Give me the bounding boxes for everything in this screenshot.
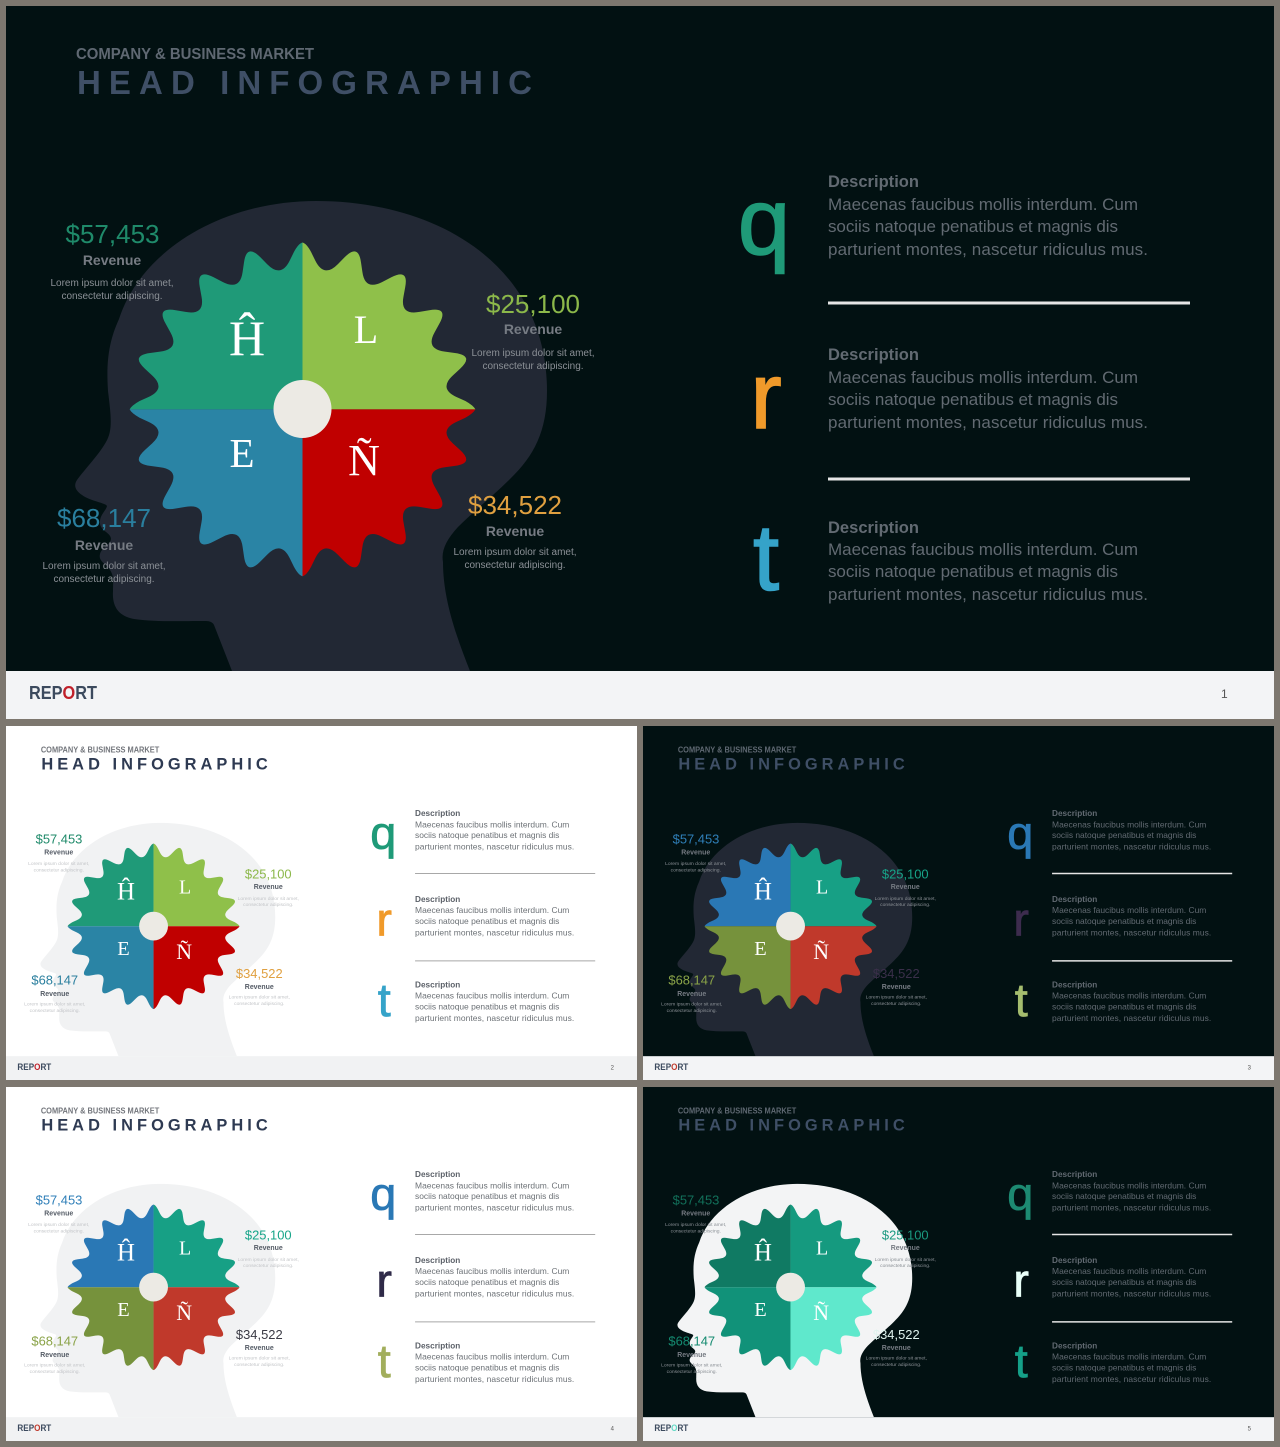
description 2: Maecenas faucibus mollis interdum. Cum — [1052, 1266, 1206, 1276]
stat: 25,100: $25,100 — [245, 866, 292, 881]
footer — [6, 1056, 637, 1080]
footer — [643, 1056, 1274, 1080]
stat: 34,522 — [866, 966, 927, 1007]
stat: 68,147: $68,147 — [57, 503, 151, 533]
stat: 34,522: consectetur adipiscing. — [234, 1001, 284, 1007]
description 3: parturient montes, nascetur ridiculus mus. — [1052, 1374, 1211, 1384]
head silhouette — [677, 823, 912, 1056]
description 3: parturient montes, nascetur ridiculus mus. — [415, 1374, 574, 1384]
stat: 57,453: $57,453 — [673, 1193, 719, 1208]
description 2: Maecenas faucibus mollis interdum. Cum — [1052, 905, 1206, 915]
stat: 68,147: consectetur adipiscing. — [54, 574, 154, 585]
title — [41, 745, 268, 774]
stat: 68,147: $68,147 — [31, 973, 78, 988]
stat: 34,522: $34,522 — [873, 1327, 920, 1342]
stat: 57,453: consectetur adipiscing. — [671, 867, 721, 873]
title: COMPANY & BUSINESS MARKET — [678, 1106, 796, 1115]
stat: 68,147 — [661, 1334, 722, 1375]
description 2 — [1052, 1256, 1211, 1299]
stat: 57,453: consectetur adipiscing. — [34, 867, 84, 873]
stat: 57,453: Lorem ipsum dolor sit amet, — [665, 1222, 726, 1228]
stat: 68,147: $68,147 — [668, 1334, 715, 1349]
title: COMPANY & BUSINESS MARKET — [678, 745, 796, 754]
description 3: parturient montes, nascetur ridiculus mus. — [415, 1013, 574, 1023]
description 2: sociis natoque penatibus et magnis dis — [1052, 1277, 1196, 1287]
stat: 34,522: Revenue — [486, 523, 544, 539]
description 2: Description — [1052, 895, 1097, 904]
letter t: t — [1015, 1335, 1028, 1387]
footer: REPORT — [17, 1423, 52, 1433]
gear letters: Ĥ — [117, 1238, 135, 1266]
title — [678, 745, 905, 774]
stat: 68,147: consectetur adipiscing. — [30, 1008, 80, 1014]
gear center circle — [776, 1273, 805, 1301]
stat: 57,453: Revenue — [44, 1211, 73, 1218]
description 2: sociis natoque penatibus et magnis dis — [828, 390, 1118, 409]
description 3: sociis natoque penatibus et magnis dis — [1052, 1363, 1196, 1372]
stat: 57,453: Revenue — [83, 252, 141, 268]
stat: 68,147: Revenue — [75, 537, 133, 553]
description 3 — [415, 981, 574, 1023]
description 1: sociis natoque penatibus et magnis dis — [828, 217, 1118, 236]
description 1 — [1052, 1170, 1211, 1213]
stat: 25,100: consectetur adipiscing. — [482, 361, 584, 372]
title — [678, 1106, 905, 1135]
head silhouette — [40, 823, 275, 1056]
stat: 34,522: $34,522 — [236, 1327, 283, 1342]
description 1: Maecenas faucibus mollis interdum. Cum — [415, 1180, 569, 1190]
stat: 57,453: Revenue — [681, 1211, 710, 1218]
head silhouette — [75, 201, 547, 671]
description 2: Maecenas faucibus mollis interdum. Cum — [415, 905, 569, 915]
description 3: Maecenas faucibus mollis interdum. Cum — [1052, 1352, 1206, 1362]
gear letters: Ñ — [813, 1301, 829, 1325]
stat: 68,147: $68,147 — [31, 1334, 78, 1349]
stat: 25,100 — [875, 866, 936, 908]
stat: 57,453: Lorem ipsum dolor sit amet, — [28, 861, 89, 867]
stat: 68,147 — [661, 973, 722, 1014]
description 1: Maecenas faucibus mollis interdum. Cum — [1052, 1180, 1206, 1190]
gear center circle — [274, 380, 332, 438]
stat: 25,100: $25,100 — [245, 1227, 292, 1242]
stat: 57,453: Revenue — [681, 850, 710, 857]
description 1: Description — [415, 809, 460, 818]
description 2: parturient montes, nascetur ridiculus mus. — [1052, 1289, 1211, 1299]
stat: 57,453: consectetur adipiscing. — [34, 1228, 84, 1234]
description 2: Description — [415, 1256, 460, 1265]
gear chart — [705, 843, 877, 1009]
stat: 25,100 — [238, 1227, 299, 1269]
stat: 25,100: Revenue — [254, 1245, 283, 1252]
stat: 68,147: Lorem ipsum dolor sit amet, — [24, 1363, 85, 1369]
description 3: sociis natoque penatibus et magnis dis — [828, 562, 1118, 581]
gear letters: L — [179, 1237, 191, 1259]
stat: 68,147: Revenue — [40, 1352, 69, 1359]
description 2: sociis natoque penatibus et magnis dis — [415, 1277, 559, 1287]
stat: 68,147: Lorem ipsum dolor sit amet, — [24, 1002, 85, 1008]
footer: REPORT — [29, 683, 97, 703]
description 1: parturient montes, nascetur ridiculus mus. — [1052, 842, 1211, 852]
stat: 25,100: consectetur adipiscing. — [880, 1263, 930, 1269]
description 1: sociis natoque penatibus et magnis dis — [1052, 1191, 1196, 1201]
stat: 57,453: $57,453 — [66, 219, 159, 249]
gear chart — [68, 843, 240, 1009]
description 3: Maecenas faucibus mollis interdum. Cum — [828, 540, 1138, 559]
description 2: Maecenas faucibus mollis interdum. Cum — [415, 1266, 569, 1276]
stat: 34,522: Lorem ipsum dolor sit amet, — [866, 1356, 927, 1362]
gear letters — [754, 876, 829, 964]
description 2: parturient montes, nascetur ridiculus mus. — [415, 928, 574, 938]
gear letters: E — [754, 1299, 767, 1321]
description 1: sociis natoque penatibus et magnis dis — [1052, 830, 1196, 840]
stat: 34,522: Revenue — [882, 984, 911, 991]
stat: 57,453 — [28, 832, 89, 873]
gear letters: Ñ — [813, 940, 829, 964]
description 3 — [1052, 981, 1211, 1023]
gear letters: E — [754, 938, 767, 960]
head silhouette — [677, 1184, 912, 1417]
slide 1: large dark variant — [6, 6, 1274, 719]
stat: 25,100 — [238, 866, 299, 908]
letter t: t — [378, 974, 391, 1026]
gear center circle — [776, 912, 805, 940]
gear letters: Ĥ — [229, 310, 265, 366]
stat: 57,453: consectetur adipiscing. — [62, 291, 162, 302]
stat: 25,100: $25,100 — [486, 289, 580, 319]
letter q: q — [738, 169, 790, 274]
gear center circle — [139, 912, 168, 940]
stat: 34,522: Revenue — [245, 984, 274, 991]
letter r: r — [1013, 1255, 1029, 1307]
gear letters — [754, 1237, 829, 1325]
stat: 68,147: Revenue — [40, 991, 69, 998]
stat: 57,453 — [665, 832, 726, 873]
footer — [643, 1417, 1274, 1441]
stat: 25,100 — [875, 1227, 936, 1269]
stat: 34,522: $34,522 — [236, 966, 283, 981]
stat: 68,147: Revenue — [677, 991, 706, 998]
description 2: parturient montes, nascetur ridiculus mus. — [828, 413, 1148, 432]
stat: 25,100: Lorem ipsum dolor sit amet, — [472, 348, 594, 359]
stat: 57,453 — [28, 1193, 89, 1234]
title — [76, 46, 532, 101]
stat: 25,100: Revenue — [504, 321, 562, 337]
description 3: Description — [415, 981, 460, 990]
gear letters: Ĥ — [754, 1238, 772, 1266]
description 2: parturient montes, nascetur ridiculus mus. — [1052, 928, 1211, 938]
stat: 68,147: consectetur adipiscing. — [30, 1369, 80, 1375]
letter r: r — [1013, 894, 1029, 946]
gear chart — [68, 1204, 240, 1370]
stat: 25,100: Lorem ipsum dolor sit amet, — [238, 1257, 299, 1263]
stat: 25,100: consectetur adipiscing. — [880, 902, 930, 908]
description 1 — [415, 809, 574, 852]
stat: 57,453 — [665, 1193, 726, 1234]
letter r: r — [376, 894, 392, 946]
letter r: r — [376, 1255, 392, 1307]
stat: 68,147 — [42, 503, 166, 585]
stat: 34,522: Revenue — [882, 1345, 911, 1352]
title: HEAD INFOGRAPHIC — [41, 1117, 268, 1135]
description 2 — [828, 346, 1148, 432]
slide 2: small light variant — [6, 726, 637, 1080]
stat: 34,522: Lorem ipsum dolor sit amet, — [866, 995, 927, 1001]
gear letters: E — [229, 430, 255, 476]
description 1 — [415, 1170, 574, 1213]
head silhouette — [40, 1184, 275, 1417]
stat: 68,147: $68,147 — [668, 973, 715, 988]
description 2 — [1052, 895, 1211, 938]
description 1: parturient montes, nascetur ridiculus mus. — [1052, 1203, 1211, 1213]
letter q: q — [370, 1168, 396, 1220]
stat: 34,522: $34,522 — [873, 966, 920, 981]
gear letters: E — [117, 938, 130, 960]
description 3: Maecenas faucibus mollis interdum. Cum — [415, 991, 569, 1001]
description 2 — [415, 1256, 574, 1299]
gear letters: L — [179, 876, 191, 898]
description 1: Maecenas faucibus mollis interdum. Cum — [1052, 819, 1206, 829]
stat: 68,147: consectetur adipiscing. — [667, 1008, 717, 1014]
gear letters: Ñ — [176, 940, 192, 964]
stat: 68,147: Revenue — [677, 1352, 706, 1359]
stat: 57,453: Lorem ipsum dolor sit amet, — [665, 861, 726, 867]
stat: 57,453: Revenue — [44, 850, 73, 857]
footer — [6, 671, 1274, 719]
description 1: Description — [1052, 1170, 1097, 1179]
letter t: t — [378, 1335, 391, 1387]
stat: 25,100 — [472, 289, 594, 372]
description 2: Description — [415, 895, 460, 904]
description 1 — [828, 173, 1148, 259]
gear letters: L — [816, 876, 828, 898]
stat: 57,453: Lorem ipsum dolor sit amet, — [50, 278, 174, 289]
stat: 57,453: $57,453 — [36, 832, 82, 847]
stat: 68,147: Lorem ipsum dolor sit amet, — [661, 1363, 722, 1369]
stat: 34,522: consectetur adipiscing. — [464, 560, 566, 571]
stat: 34,522: Lorem ipsum dolor sit amet, — [229, 1356, 290, 1362]
description 3: Description — [415, 1342, 460, 1351]
letter q: q — [1007, 1168, 1033, 1220]
stat: 25,100: Revenue — [254, 884, 283, 891]
gear letters: Ñ — [348, 436, 380, 485]
stat: 57,453 — [50, 219, 174, 302]
letter r: r — [750, 343, 782, 448]
stat: 57,453: consectetur adipiscing. — [671, 1228, 721, 1234]
description 1: parturient montes, nascetur ridiculus mus. — [415, 842, 574, 852]
gear letters — [117, 1237, 192, 1325]
stat: 25,100: Lorem ipsum dolor sit amet, — [238, 896, 299, 902]
footer: 4 — [611, 1427, 615, 1433]
stat: 25,100: Lorem ipsum dolor sit amet, — [875, 1257, 936, 1263]
stat: 25,100: Lorem ipsum dolor sit amet, — [875, 896, 936, 902]
title: HEAD INFOGRAPHIC — [41, 756, 268, 774]
gear letters: L — [354, 307, 378, 352]
stat: 34,522 — [866, 1327, 927, 1368]
gear chart — [130, 243, 475, 576]
stat: 34,522 — [229, 1327, 290, 1368]
stat: 57,453: $57,453 — [36, 1193, 82, 1208]
description 2 — [415, 895, 574, 938]
stat: 57,453: Lorem ipsum dolor sit amet, — [28, 1222, 89, 1228]
gear letters: L — [816, 1237, 828, 1259]
stat: 34,522: Lorem ipsum dolor sit amet, — [454, 547, 576, 558]
stat: 25,100: Revenue — [891, 1245, 920, 1252]
description 3: Description — [828, 519, 919, 537]
stat: 34,522 — [229, 966, 290, 1007]
title: COMPANY & BUSINESS MARKET — [41, 745, 159, 754]
slide 3: small dark variant, blue-teal-olive-red — [643, 726, 1274, 1080]
gear letters: Ñ — [176, 1301, 192, 1325]
description 1: Maecenas faucibus mollis interdum. Cum — [828, 195, 1138, 214]
description 3: sociis natoque penatibus et magnis dis — [415, 1002, 559, 1011]
title: HEAD INFOGRAPHIC — [678, 1117, 905, 1135]
stat: 25,100: Revenue — [891, 884, 920, 891]
stat: 34,522: Revenue — [245, 1345, 274, 1352]
stat: 34,522: consectetur adipiscing. — [234, 1362, 284, 1368]
footer: REPORT — [17, 1062, 52, 1072]
title: HEAD INFOGRAPHIC — [678, 756, 905, 774]
description 2: Description — [828, 346, 919, 364]
description 1: sociis natoque penatibus et magnis dis — [415, 830, 559, 840]
stat: 68,147: Lorem ipsum dolor sit amet, — [661, 1002, 722, 1008]
description 2: Description — [1052, 1256, 1097, 1265]
description 3: Description — [1052, 981, 1097, 990]
stat: 25,100: consectetur adipiscing. — [243, 1263, 293, 1269]
stat: 34,522: consectetur adipiscing. — [871, 1001, 921, 1007]
title — [41, 1106, 268, 1135]
description 1: Description — [1052, 809, 1097, 818]
gear letters: Ĥ — [754, 877, 772, 905]
description 3 — [828, 519, 1148, 604]
slide 5: small dark variant, white head, green palette — [643, 1087, 1274, 1441]
stat: 68,147 — [24, 1334, 85, 1375]
footer: 3 — [1248, 1066, 1252, 1072]
letter t: t — [1015, 974, 1028, 1026]
description 1: Description — [828, 173, 919, 191]
footer: REPORT — [654, 1062, 689, 1072]
description 2: Maecenas faucibus mollis interdum. Cum — [828, 368, 1138, 387]
gear letters: E — [117, 1299, 130, 1321]
stat: 25,100: $25,100 — [882, 1227, 929, 1242]
footer: 1 — [1221, 687, 1228, 701]
stat: 68,147 — [24, 973, 85, 1014]
slide 4: small light variant, blue-teal-olive-red — [6, 1087, 637, 1441]
description 3: parturient montes, nascetur ridiculus mus. — [828, 585, 1148, 604]
gear center circle — [139, 1273, 168, 1301]
gear chart — [705, 1204, 877, 1370]
gear letters — [229, 307, 380, 485]
title: COMPANY & BUSINESS MARKET — [41, 1106, 159, 1115]
letter t: t — [753, 505, 779, 610]
stat: 25,100: consectetur adipiscing. — [243, 902, 293, 908]
stat: 25,100: $25,100 — [882, 866, 929, 881]
stat: 68,147: consectetur adipiscing. — [667, 1369, 717, 1375]
description 3: Maecenas faucibus mollis interdum. Cum — [1052, 991, 1206, 1001]
description 1: parturient montes, nascetur ridiculus mus. — [828, 240, 1148, 259]
description 2: sociis natoque penatibus et magnis dis — [415, 916, 559, 926]
footer: REPORT — [654, 1423, 689, 1433]
description 1: Description — [415, 1170, 460, 1179]
stat: 34,522: Lorem ipsum dolor sit amet, — [229, 995, 290, 1001]
description 1: Maecenas faucibus mollis interdum. Cum — [415, 819, 569, 829]
description 2: parturient montes, nascetur ridiculus mus. — [415, 1289, 574, 1299]
description 3: Maecenas faucibus mollis interdum. Cum — [415, 1352, 569, 1362]
description 1 — [1052, 809, 1211, 852]
title: COMPANY & BUSINESS MARKET — [76, 46, 314, 63]
description 1: parturient montes, nascetur ridiculus mus. — [415, 1203, 574, 1213]
description 3: Description — [1052, 1342, 1097, 1351]
description 3 — [415, 1342, 574, 1384]
gear letters: Ĥ — [117, 877, 135, 905]
description 3: parturient montes, nascetur ridiculus mus. — [1052, 1013, 1211, 1023]
gear letters — [117, 876, 192, 964]
description 3 — [1052, 1342, 1211, 1384]
footer: 2 — [611, 1066, 615, 1072]
stat: 34,522 — [454, 490, 576, 571]
stat: 34,522: $34,522 — [468, 490, 562, 520]
stat: 68,147: Lorem ipsum dolor sit amet, — [42, 561, 166, 572]
description 1: sociis natoque penatibus et magnis dis — [415, 1191, 559, 1201]
stat: 34,522: consectetur adipiscing. — [871, 1362, 921, 1368]
stat: 57,453: $57,453 — [673, 832, 719, 847]
description 2: sociis natoque penatibus et magnis dis — [1052, 916, 1196, 926]
description 3: sociis natoque penatibus et magnis dis — [415, 1363, 559, 1372]
description 3: sociis natoque penatibus et magnis dis — [1052, 1002, 1196, 1011]
letter q: q — [370, 807, 396, 859]
letter q: q — [1007, 807, 1033, 859]
footer — [6, 1417, 637, 1441]
footer: 5 — [1248, 1427, 1252, 1433]
title: HEAD INFOGRAPHIC — [77, 64, 532, 101]
